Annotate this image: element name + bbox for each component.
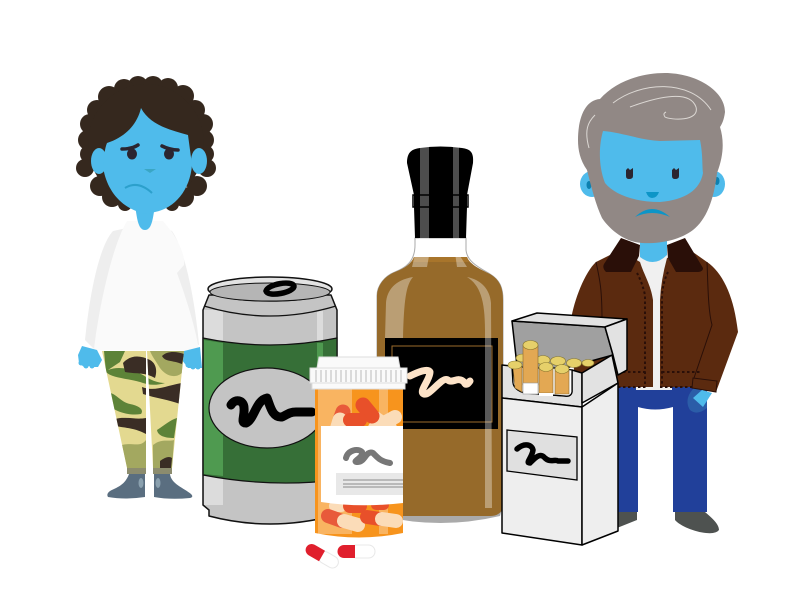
- pack label: [507, 430, 577, 480]
- label text box: [336, 473, 403, 495]
- man shoes: [612, 512, 719, 533]
- woman cuffs: [127, 468, 172, 474]
- man trousers: [612, 386, 707, 512]
- pack side: [582, 383, 618, 545]
- capsules inside: [328, 405, 396, 525]
- beer can: [203, 277, 337, 524]
- bottle label: [321, 426, 403, 505]
- capsule flat: [338, 545, 375, 558]
- bottle glass: [377, 238, 503, 516]
- can label oval: [209, 368, 325, 448]
- bottle cap: [407, 146, 473, 238]
- bottle body: [315, 389, 403, 538]
- man hair highlights: [587, 87, 711, 148]
- man face: [600, 131, 703, 217]
- liquid surface: [412, 257, 469, 262]
- jacket stitching: [618, 272, 700, 387]
- woman neck and sweater: [85, 205, 199, 350]
- capsule tilted: [303, 542, 341, 570]
- woman figure: [76, 76, 216, 499]
- loose capsules: [303, 542, 375, 570]
- pack front: [502, 398, 582, 545]
- pack lid side: [605, 319, 627, 375]
- man neck and shirt: [636, 235, 672, 390]
- man collar: [603, 238, 703, 272]
- can green band: [203, 338, 337, 483]
- woman face: [104, 108, 192, 213]
- can scribble: [231, 398, 312, 423]
- bottle liquid: [377, 257, 503, 516]
- cigarettes: [508, 340, 569, 396]
- can rim: [204, 306, 336, 316]
- woman hair back: [76, 76, 216, 211]
- man hair and beard: [578, 73, 725, 243]
- bottle highlights: [385, 238, 492, 508]
- illustration: [76, 73, 738, 568]
- woman hands: [78, 346, 202, 370]
- pack inner cup: [513, 366, 572, 396]
- bottle label: [385, 338, 498, 429]
- man ears: [580, 171, 725, 197]
- man figure: [571, 73, 738, 533]
- bottle highlights: [318, 389, 388, 534]
- pill bottle: [310, 357, 407, 538]
- woman camo trousers: [100, 351, 186, 469]
- label scribble: [346, 450, 390, 463]
- pack lid interior: [512, 321, 613, 375]
- pack side upper: [582, 355, 618, 403]
- woman ears: [91, 148, 207, 174]
- pack scribble: [517, 445, 568, 463]
- man hand: [693, 390, 712, 407]
- can top: [208, 277, 332, 301]
- can body: [203, 295, 337, 524]
- can right highlight: [317, 310, 323, 500]
- can green highlight: [204, 340, 323, 483]
- woman shoes: [107, 474, 192, 499]
- pack lid top: [512, 313, 627, 327]
- man brown jacket: [571, 250, 738, 392]
- cigarette pack: [502, 313, 627, 545]
- pack upper front: [502, 365, 582, 407]
- whiskey bottle: [377, 146, 503, 523]
- pill cap: [310, 357, 407, 389]
- back cigarettes: [516, 354, 594, 368]
- bottle shadow: [382, 505, 503, 523]
- can left highlight: [204, 310, 223, 505]
